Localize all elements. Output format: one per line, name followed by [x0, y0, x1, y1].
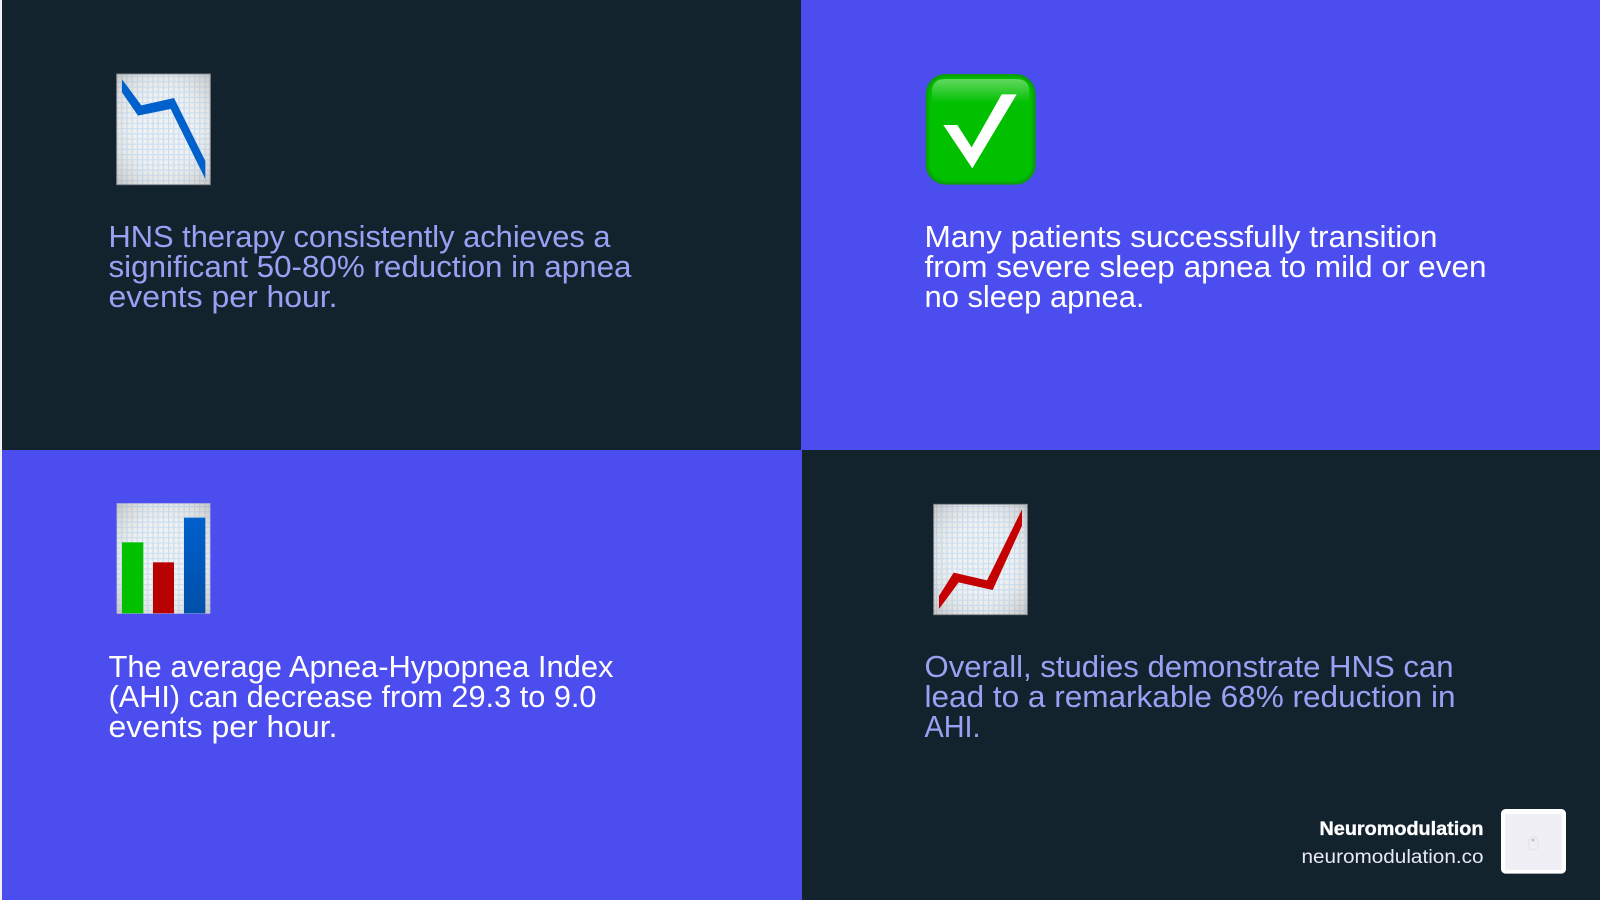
icon: chart decreasing — [117, 74, 210, 185]
text: top left statement — [108, 219, 632, 314]
text: bottom right statement: AHI. — [924, 709, 980, 744]
text: bottom left statement: events per hour. — [108, 709, 338, 744]
text: bottom right statement — [924, 649, 1456, 744]
text: bottom right statement: lead to a remarkable 68% reduction in — [924, 679, 1456, 714]
text: top left statement: significant 50-80% reduction in apnea — [108, 249, 632, 284]
panel: bottom left background — [0, 450, 802, 900]
text: bottom right statement: Overall, studies demonstrate HNS can — [924, 649, 1454, 684]
logo tile — [1501, 809, 1566, 874]
brand name: Neuromodulation — [1320, 819, 1484, 840]
panel: bottom right background — [802, 450, 1600, 900]
text: top left statement: HNS therapy consistently achieves a — [108, 219, 611, 254]
icon: green check mark — [926, 74, 1036, 185]
panel: top right background — [801, 0, 1600, 450]
text: top right statement — [924, 219, 1486, 314]
icon: chart increasing — [934, 504, 1027, 615]
text: top right statement: no sleep apnea. — [924, 279, 1144, 314]
text: bottom left statement: The average Apnea-Hypopnea Index — [108, 649, 614, 684]
panel: top left background — [0, 0, 801, 450]
text: bottom left statement — [108, 649, 614, 744]
text: top left statement: events per hour. — [108, 279, 338, 314]
brand url: neuromodulation.co — [1302, 847, 1484, 868]
text: top right statement: Many patients successfully transition — [924, 219, 1438, 254]
icon: bar chart — [117, 503, 210, 614]
text: top right statement: from severe sleep apnea to mild or even — [924, 249, 1486, 284]
text: bottom left statement: (AHI) can decrease from 29.3 to 9.0 — [108, 679, 596, 714]
